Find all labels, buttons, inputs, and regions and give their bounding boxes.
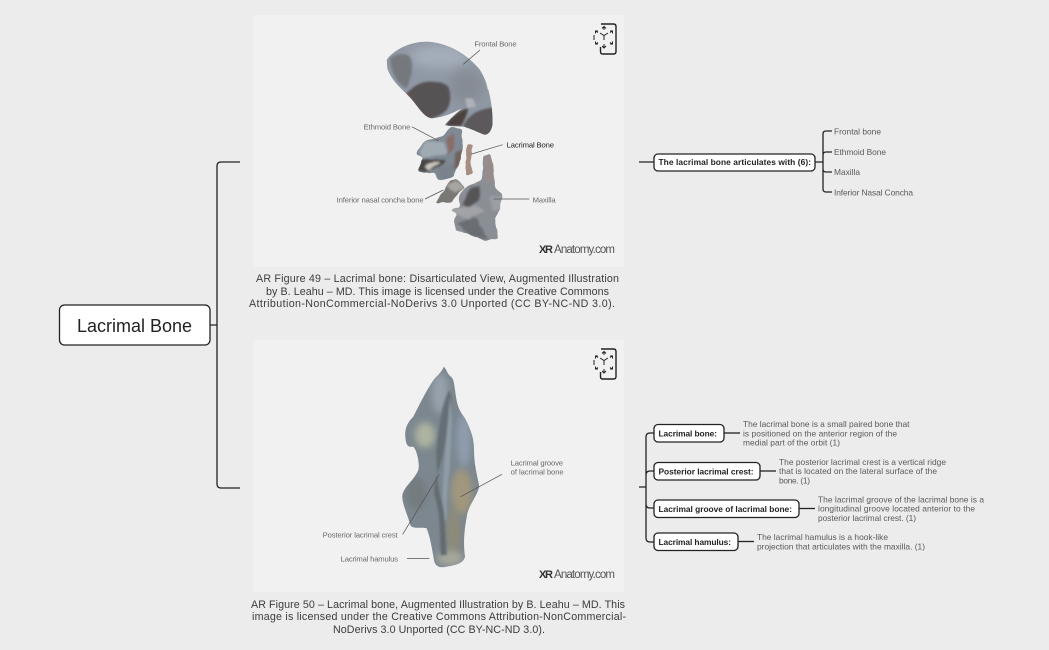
caption: figure 50: NoDerivs 3.0 Unported (CC BY-NC-ND 3.0). — [333, 624, 545, 636]
definition: posterior lacrimal crest: The posterior lacrimal crest is a vertical ridge — [779, 457, 946, 467]
watermark: Anatomy.com — [554, 244, 615, 256]
labels: Lacrimal groove — [511, 458, 563, 467]
panel: disarticulated view figure — [337, 23, 617, 256]
labels: of lacrimal bone — [511, 468, 564, 477]
labels: Lacrimal hamulus — [341, 554, 398, 563]
caption: figure 49 — [249, 273, 619, 310]
definition: lacrimal groove: longitudinal groove located anterior to the — [818, 504, 975, 514]
node: articulates with — [654, 154, 815, 171]
definition: lacrimal bone: is positioned on the anterior region of the — [743, 428, 897, 438]
lacrimal bone (small) — [465, 144, 473, 176]
frontal bone — [383, 40, 497, 137]
definition: lacrimal bone: The lacrimal bone is a small paired bone that — [743, 419, 910, 429]
definition: lacrimal groove: Lacrimal groove of lacrimal bone: — [658, 504, 792, 514]
definition: posterior lacrimal crest: Posterior lacrimal crest: — [658, 466, 754, 476]
labels: Posterior lacrimal crest — [323, 530, 399, 539]
caption: figure 49: Attribution-NonCommercial-NoDerivs 3.0 Unported (CC BY-NC-ND 3.0). — [249, 298, 615, 310]
caption: figure 50 — [251, 599, 626, 636]
labels: Maxilla — [533, 195, 556, 204]
labels: Frontal Bone — [474, 40, 517, 49]
labels — [337, 40, 556, 204]
list: articulating bones: Inferior Nasal Concha — [834, 188, 913, 198]
icon: AR cube phone — [594, 24, 616, 54]
list: articulating bones: Maxilla — [834, 167, 860, 177]
branch: articulations — [639, 126, 913, 198]
definition: posterior lacrimal crest: bone. (1) — [779, 476, 810, 486]
definition: lacrimal hamulus: The lacrimal hamulus is a hook-like — [757, 532, 888, 542]
definition: lacrimal groove: posterior lacrimal crest. (1) — [818, 513, 916, 523]
definition: posterior lacrimal crest — [654, 457, 946, 486]
labels: Lacrimal Bone — [507, 140, 554, 149]
watermark: XR — [539, 569, 553, 581]
root bracket connector — [210, 162, 240, 488]
ethmoid bone — [417, 127, 463, 180]
maxilla — [450, 153, 502, 241]
leader lines — [403, 474, 502, 558]
illustration: disarticulated bones — [337, 40, 556, 241]
list: articulating bones: Frontal bone — [834, 126, 881, 136]
node: articulates with: The lacrimal bone articulates with (6): — [658, 157, 811, 167]
main node: Lacrimal Bone — [60, 305, 210, 345]
bracket: articulating bones — [823, 131, 832, 192]
caption: figure 50: AR Figure 50 – Lacrimal bone, Augmented Illustration by B. Leahu – MD. This — [251, 599, 625, 611]
panel: lacrimal bone figure — [323, 348, 617, 580]
watermark: XR — [539, 244, 553, 256]
definition: posterior lacrimal crest: that is located on the lateral surface of the — [779, 466, 937, 476]
labels: Ethmoid Bone — [364, 123, 410, 132]
definition: lacrimal bone — [654, 419, 910, 448]
caption: figure 50: image is licensed under the Creative Commons Attribution-NonCommercial- — [252, 611, 626, 623]
definition: lacrimal bone: Lacrimal bone: — [658, 428, 717, 438]
main node: Lacrimal Bone: Lacrimal Bone — [77, 316, 192, 336]
definition: lacrimal groove — [654, 494, 984, 523]
definition: lacrimal groove: The lacrimal groove of the lacrimal bone is a — [818, 494, 984, 504]
list: articulating bones: Ethmoid Bone — [834, 147, 886, 157]
list: articulating bones — [834, 126, 913, 198]
caption: figure 49: AR Figure 49 – Lacrimal bone: Disarticulated View, Augmented Illustration — [256, 273, 619, 285]
labels — [323, 458, 564, 563]
bracket: definitions — [639, 433, 654, 542]
branch: definitions — [639, 419, 984, 552]
definition: lacrimal hamulus: Lacrimal hamulus: — [658, 537, 731, 547]
leader lines — [412, 50, 529, 199]
caption: figure 49: by B. Leahu – MD. This image is licensed under the Creative Commons — [266, 286, 609, 298]
definition: lacrimal hamulus — [654, 532, 925, 552]
icon: AR cube phone — [594, 349, 616, 379]
inferior nasal concha — [435, 179, 466, 204]
definition: lacrimal hamulus: projection that articulates with the maxilla. (1) — [757, 542, 925, 552]
illustration: lacrimal bone — [323, 363, 564, 570]
watermark: Anatomy.com — [554, 569, 615, 581]
definition: lacrimal bone: medial part of the orbit (1) — [743, 438, 840, 448]
labels: Inferior nasal concha bone — [337, 195, 424, 204]
